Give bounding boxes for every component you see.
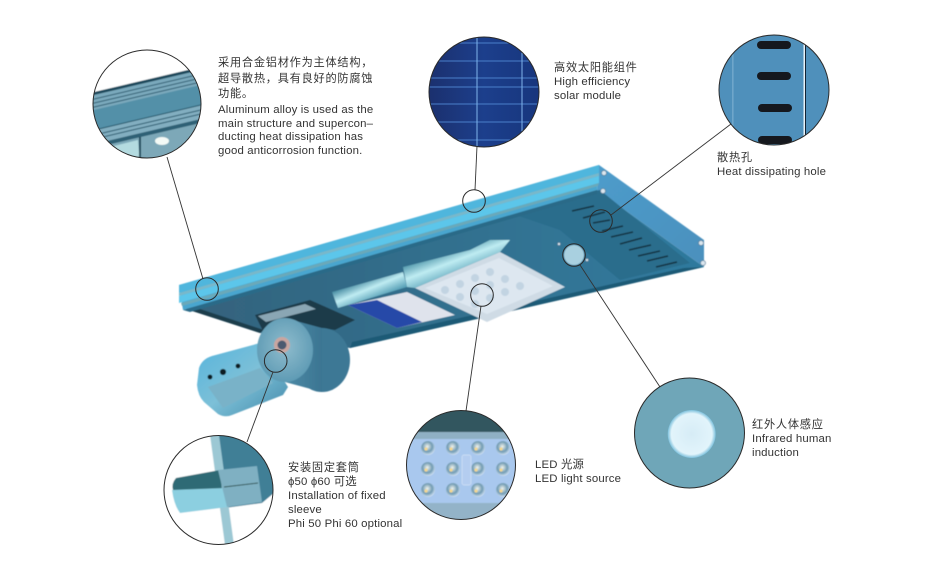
mounting bracket bbox=[255, 300, 355, 335]
text: fixed sleeve: Phi 50 Phi 60 optional bbox=[288, 518, 402, 530]
text: heat dissipating hole: 散热孔 bbox=[717, 150, 753, 164]
detail circle: fixed sleeve bbox=[164, 435, 274, 545]
text: aluminium alloy structure bbox=[218, 55, 374, 157]
vent recess bbox=[507, 190, 690, 280]
detail circle: LED light source bbox=[406, 410, 516, 520]
text: aluminium alloy structure: 采用合金铝材作为主体结构， bbox=[218, 55, 373, 69]
text: aluminium alloy structure: 超导散热，具有良好的防腐蚀 bbox=[218, 71, 373, 85]
text: LED light source: LED 光源 bbox=[535, 457, 585, 471]
vent slots bbox=[572, 206, 677, 267]
corner screws bbox=[558, 170, 706, 266]
text: infrared induction: 红外人体感应 bbox=[752, 417, 824, 431]
small target rings bbox=[196, 190, 612, 372]
text: solar module: High efficiency bbox=[554, 76, 630, 88]
lower edge strip bbox=[350, 267, 704, 348]
text: fixed sleeve: sleeve bbox=[288, 504, 322, 516]
text: solar module: 高效太阳能组件 bbox=[554, 60, 638, 74]
detail circle: heat dissipating hole bbox=[718, 34, 830, 146]
detail circle: solar module bbox=[428, 36, 540, 148]
light body side panel bbox=[597, 165, 704, 267]
text: LED light source: LED light source bbox=[535, 473, 621, 485]
text: solar module bbox=[554, 60, 638, 102]
text: infrared induction bbox=[752, 417, 832, 459]
text: fixed sleeve bbox=[288, 460, 402, 530]
LED lens cover bbox=[415, 252, 565, 322]
text: aluminium alloy structure: 功能。 bbox=[218, 86, 254, 100]
text: fixed sleeve: 安装固定套筒 bbox=[288, 460, 360, 474]
text: LED light source bbox=[535, 457, 621, 485]
product label bbox=[348, 292, 455, 328]
detail circle: aluminium alloy rail bbox=[92, 50, 202, 158]
text: infrared induction: Infrared human bbox=[752, 433, 832, 445]
text: heat dissipating hole bbox=[717, 150, 826, 178]
text: aluminium alloy structure: ducting heat dissipation has bbox=[218, 131, 363, 143]
text: fixed sleeve: ϕ50 ϕ60 可选 bbox=[288, 475, 357, 488]
arm housing bbox=[332, 240, 510, 308]
light underside plate bbox=[183, 190, 704, 348]
mounting drum bbox=[257, 318, 350, 392]
left lower edge bbox=[186, 309, 264, 333]
text: aluminium alloy structure: good anticorrosion function. bbox=[218, 145, 362, 157]
text: fixed sleeve: Installation of fixed bbox=[288, 490, 386, 502]
leader lines bbox=[167, 124, 731, 442]
aluminium rail bbox=[179, 165, 599, 312]
text: infrared induction: induction bbox=[752, 447, 799, 459]
text: heat dissipating hole: Heat dissipating hole bbox=[717, 166, 826, 178]
infrared sensor bbox=[564, 245, 584, 265]
detail circle: infrared sensor bbox=[634, 378, 744, 488]
street light product bbox=[179, 165, 706, 416]
text: aluminium alloy structure: Aluminum alloy is used as the bbox=[218, 104, 373, 116]
text: aluminium alloy structure: main structure and supercon– bbox=[218, 118, 374, 130]
sleeve tube bbox=[197, 343, 288, 416]
text: solar module: solar module bbox=[554, 90, 621, 102]
